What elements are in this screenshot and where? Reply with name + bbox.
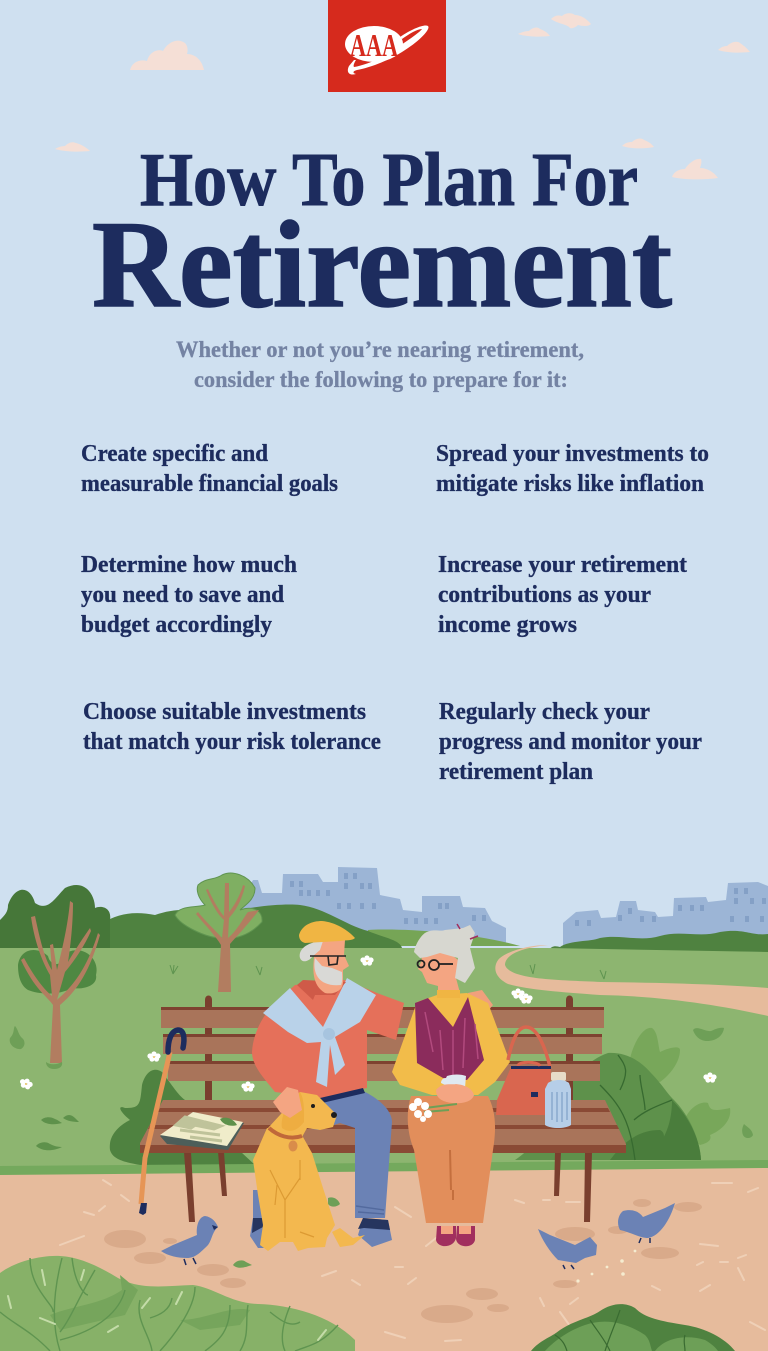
ground path	[0, 1168, 768, 1351]
woman: bouquet	[409, 1098, 457, 1122]
tip: spread investments: mitigate risks like inflation	[436, 471, 704, 497]
tip: suitable investments: that match your risk tolerance	[83, 729, 381, 755]
left tree	[0, 885, 110, 1069]
tip: increase contributions: Increase your retirement	[438, 552, 687, 578]
tip: financial goals	[81, 441, 338, 497]
tip: financial goals: Create specific and	[81, 441, 269, 467]
tip: increase contributions: contributions as your	[438, 582, 651, 608]
bird left	[161, 1216, 218, 1265]
ground patches	[104, 1199, 702, 1323]
bird pecking right	[618, 1203, 675, 1243]
dog: body	[253, 1128, 335, 1251]
foreground bush right	[531, 1304, 735, 1351]
man: far leg	[253, 1190, 263, 1220]
grass lawn	[0, 948, 768, 1175]
tip: monitor progress	[439, 699, 702, 785]
clouds	[55, 13, 750, 179]
walking cane	[139, 1030, 184, 1215]
middle tree	[175, 873, 262, 992]
woman: sweater	[392, 993, 510, 1095]
logo: AAA red badge	[328, 0, 446, 92]
grass edge band	[0, 1160, 768, 1176]
tip: save and budget: you need to save and	[81, 582, 285, 608]
man: flat cap	[299, 921, 355, 943]
man: beard	[314, 958, 342, 985]
man hand on woman shoulder	[468, 990, 493, 1020]
far hills and hedges	[110, 905, 768, 952]
tip: increase contributions: income grows	[438, 612, 577, 638]
tip: increase contributions	[438, 552, 687, 638]
woman: shoes	[436, 1226, 475, 1246]
man hand on dog	[273, 1087, 302, 1118]
woman: hands	[436, 1084, 474, 1103]
bird pecking centre	[538, 1229, 597, 1269]
tip: spread investments: Spread your investments to	[436, 441, 709, 467]
subtitle: Whether or not you’re nearing retirement,	[176, 337, 584, 362]
ground specks	[60, 1180, 765, 1341]
man: head	[313, 940, 349, 993]
man: sweater body and arm	[252, 980, 404, 1098]
tip: monitor progress: retirement plan	[439, 759, 593, 785]
woman: hair	[414, 925, 475, 983]
winding path	[495, 945, 768, 1016]
dog: head	[268, 1092, 337, 1140]
tip: suitable investments: Choose suitable investments	[83, 699, 366, 725]
man: sweater scarf	[263, 978, 376, 1087]
subtitle: consider the following to prepare for it:	[194, 367, 568, 392]
man: shoes	[250, 1218, 392, 1248]
seated woman	[392, 924, 510, 1246]
bench	[140, 996, 626, 1222]
tip: save and budget	[81, 552, 297, 638]
dog: collar and tag	[269, 1128, 302, 1138]
handbag	[496, 1027, 551, 1115]
flowers in lawn	[18, 955, 717, 1092]
lawn tufts and leaves	[10, 964, 753, 1150]
tip: monitor progress: progress and monitor your	[439, 729, 702, 755]
tip: monitor progress: Regularly check your	[439, 699, 650, 725]
seated man	[250, 921, 404, 1248]
title: Retirement	[92, 196, 672, 333]
woman: cup	[441, 1074, 466, 1088]
man: hair	[300, 941, 323, 961]
man: glasses	[310, 956, 346, 965]
leaf by dog	[328, 1197, 340, 1207]
thermos flask	[545, 1072, 571, 1128]
tip: save and budget: budget accordingly	[81, 612, 272, 638]
woman: hair pins	[457, 924, 478, 939]
title	[92, 138, 672, 333]
woman: face and neck	[418, 952, 460, 993]
tip: suitable investments	[83, 699, 381, 755]
woman: skirt	[408, 1096, 495, 1223]
woman: glasses	[418, 960, 453, 970]
woman: vest	[415, 997, 484, 1080]
green leaf on ground	[233, 1260, 252, 1268]
tip: spread investments	[436, 441, 709, 497]
bush right of bench	[515, 1028, 730, 1160]
tip: financial goals: measurable financial goals	[81, 471, 338, 497]
tip: save and budget: Determine how much	[81, 552, 297, 578]
foreground bush left	[0, 1256, 355, 1351]
bush behind bench left	[110, 1070, 255, 1165]
city skyline	[235, 867, 768, 950]
logo: AAA red badge: AAA	[350, 27, 398, 63]
crumbs	[576, 1250, 636, 1283]
subtitle	[176, 337, 584, 392]
newspaper with leaf	[160, 1112, 244, 1150]
title: How To Plan For	[140, 138, 638, 222]
golden dog	[253, 1092, 365, 1251]
dog: tail	[332, 1228, 365, 1247]
man: trousers	[308, 1091, 392, 1218]
man: collar	[297, 980, 346, 1000]
